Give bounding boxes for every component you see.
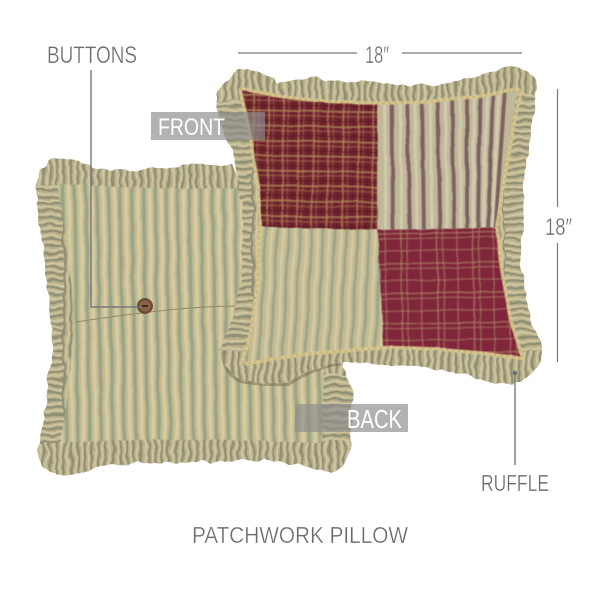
front pillow [210,60,545,390]
back ruffle [30,150,360,480]
label: buttons: BUTTONS [47,42,137,69]
panel: bottom right plaid [378,228,522,358]
label: ruffle: RUFFLE [481,470,549,496]
back pillow [30,150,360,480]
dimension: height: 18″ [545,214,572,241]
leader: buttons [91,70,142,307]
front ruffle [210,60,545,390]
panel: top right stripes [378,90,518,232]
label: front [151,112,265,141]
leader: ruffle [513,371,517,465]
title: PATCHWORK PILLOW [192,522,408,548]
back seam [76,306,240,322]
label: back [295,404,408,434]
label: back: BACK [347,404,403,434]
dimension: width: 18″ [365,42,389,69]
panel: top left plaid [241,90,378,230]
panel: bottom left stripes [246,227,383,363]
cord trim [240,89,523,364]
button [137,298,153,314]
label: front: FRONT [158,114,225,141]
front shadow [220,350,343,386]
back panel [57,183,325,443]
